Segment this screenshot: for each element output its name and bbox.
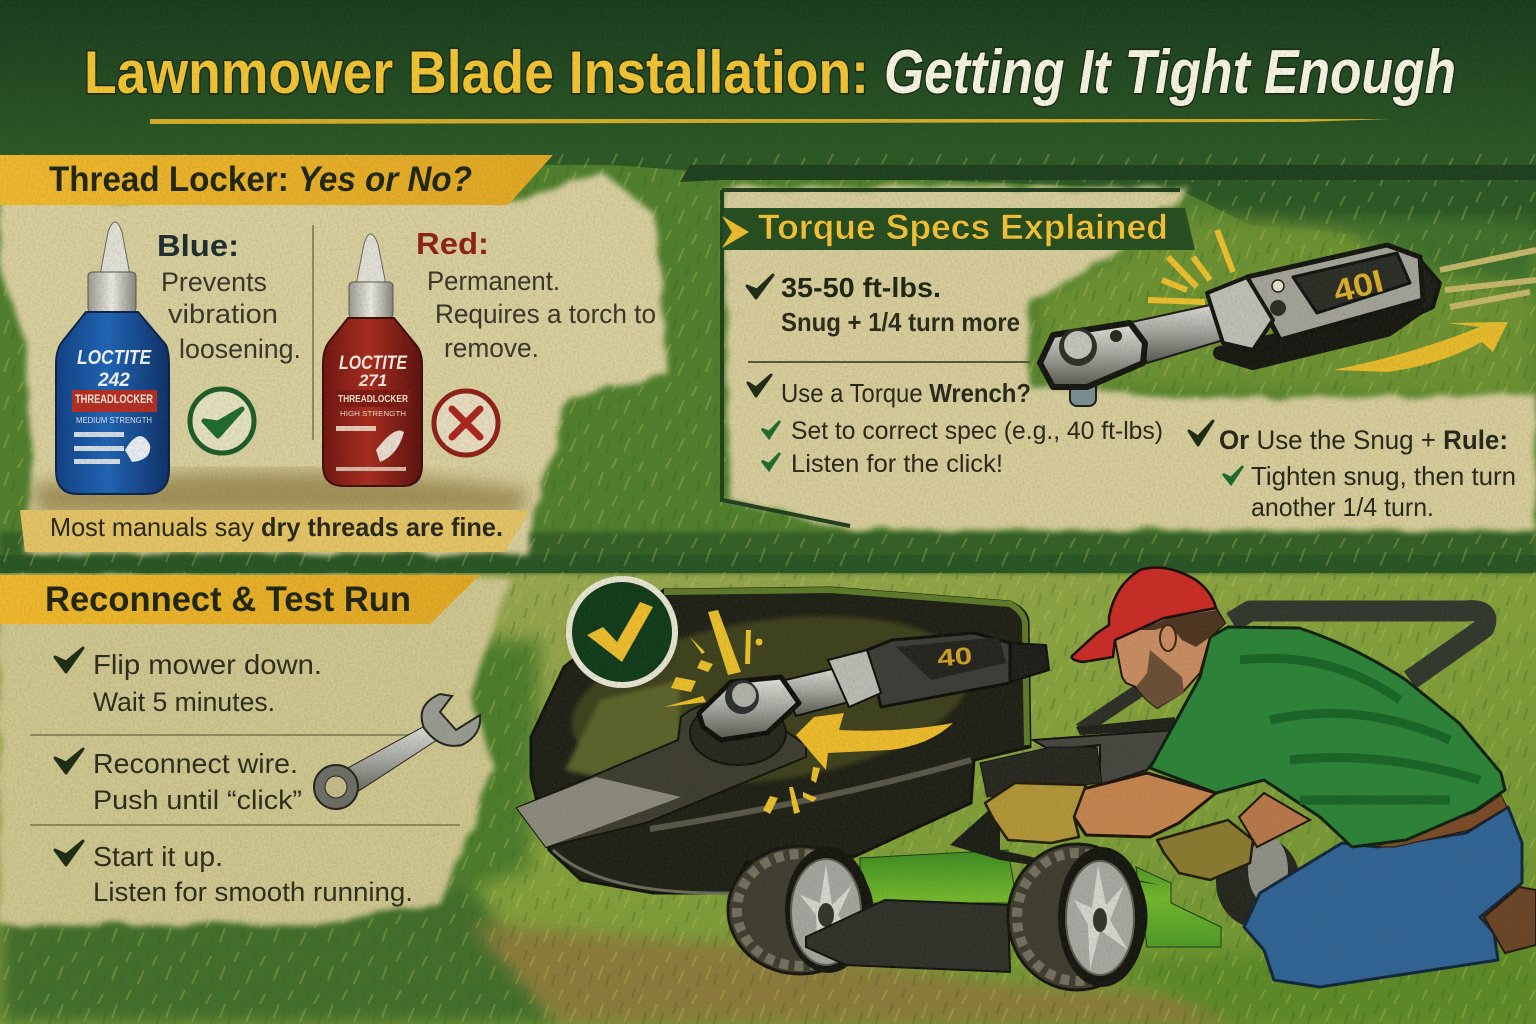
glove lower bbox=[1157, 820, 1253, 880]
deck rim highlight bbox=[664, 590, 1027, 745]
mower handle mount bbox=[1076, 717, 1175, 735]
mower shroud bbox=[1033, 730, 1175, 785]
torque wrench option: Set to correct spec (e.g., 40 ft-lbs) bbox=[791, 417, 1163, 445]
jeans bbox=[1244, 807, 1522, 987]
torque wrench option: Listen for the click! bbox=[791, 450, 1003, 478]
icon: wrench bbox=[314, 694, 480, 809]
icon: red Loctite bottle: 271 bbox=[358, 371, 387, 390]
icon: digital torque wrench: 40I bbox=[1330, 262, 1387, 309]
upper arm bbox=[1074, 773, 1216, 837]
panel background: thread locker bbox=[0, 170, 668, 553]
blade bbox=[517, 700, 806, 847]
blade hub bbox=[690, 701, 786, 765]
beard bbox=[1136, 650, 1184, 708]
spec line: 35-50 ft-lbs. bbox=[781, 272, 941, 303]
boot bbox=[1484, 887, 1536, 953]
panel background: reconnect bbox=[0, 578, 510, 925]
step: flip mower: Flip mower down. bbox=[93, 649, 322, 680]
step: start it up: Start it up. bbox=[93, 841, 223, 872]
panel: reconnect and test run bbox=[0, 575, 510, 925]
step: reconnect wire: Reconnect wire. bbox=[93, 748, 298, 779]
green mower body bbox=[860, 850, 1221, 947]
divider bbox=[748, 361, 1030, 363]
step: flip mower: Wait 5 minutes. bbox=[93, 687, 275, 717]
panel: torque specs bbox=[680, 165, 1536, 530]
mower handle upper bbox=[1232, 611, 1486, 680]
belt bbox=[1375, 795, 1507, 847]
label: red: Permanent. bbox=[427, 266, 560, 296]
dividers bbox=[30, 735, 460, 825]
callout: dry threads: Most manuals say dry threads are fine. bbox=[50, 512, 503, 542]
deck inner moss bbox=[561, 593, 979, 807]
red cap bbox=[1072, 568, 1216, 662]
icon: digital torque wrench bbox=[1040, 245, 1440, 406]
label: red: Requires a torch to bbox=[435, 299, 656, 329]
wheel: rear bbox=[1216, 836, 1300, 928]
icon: blue Loctite bottle bbox=[56, 222, 169, 494]
deck lower highlight bbox=[553, 850, 731, 893]
label: blue bbox=[157, 228, 301, 364]
heading: torque specs: Torque Specs Explained bbox=[758, 208, 1168, 247]
icon: blue Loctite bottle: 242 bbox=[97, 370, 130, 391]
title underline bbox=[150, 119, 1390, 124]
label: red bbox=[416, 226, 656, 363]
torque wrench option bbox=[748, 375, 1163, 478]
icon: blue Loctite bottle: THREADLOCKER bbox=[75, 394, 154, 406]
icon: red Loctite bottle: THREADLOCKER bbox=[338, 393, 408, 405]
step: reconnect wire: Push until “click” bbox=[93, 785, 302, 815]
step: start it up: Listen for smooth running. bbox=[93, 877, 413, 907]
shirt folds bbox=[1240, 658, 1480, 800]
mower shroud plate bbox=[980, 747, 1102, 797]
panel top band bbox=[680, 165, 1536, 182]
panel: thread locker bbox=[0, 155, 668, 553]
label: blue: Prevents bbox=[161, 267, 267, 297]
snug rule option: Or Use the Snug + Rule: bbox=[1219, 425, 1508, 455]
face bbox=[1115, 608, 1225, 708]
icon: red Loctite bottle bbox=[323, 234, 422, 486]
torque wrench on blade: 40 bbox=[936, 643, 973, 673]
heading banner: thread locker: Thread Locker: Yes or No? bbox=[49, 160, 472, 199]
icon: blue check bbox=[190, 389, 254, 453]
icon: red cross bbox=[434, 391, 498, 455]
icon: spark burst bbox=[1148, 230, 1233, 302]
deck lower lip bbox=[650, 760, 971, 829]
label: blue: Blue: bbox=[157, 228, 239, 263]
yellow sparks upper bbox=[664, 610, 751, 707]
heading banner: thread locker bbox=[0, 155, 553, 205]
wheel: front left bbox=[728, 846, 872, 974]
glove upper bbox=[985, 783, 1086, 843]
divider bbox=[312, 225, 314, 440]
icon: red Loctite bottle: LOCTITE bbox=[339, 353, 408, 374]
lower forearm bbox=[1239, 793, 1310, 847]
label: blue: vibration bbox=[168, 299, 278, 329]
mower front skirt bbox=[806, 900, 1010, 972]
panel frame bbox=[722, 190, 1180, 526]
icon: blue Loctite bottle: MEDIUM STRENGTH bbox=[76, 416, 152, 425]
callout: dry threads bbox=[20, 510, 530, 552]
icon: yellow motion arrow bbox=[1333, 322, 1508, 372]
step: flip mower bbox=[55, 648, 322, 717]
check badge bbox=[569, 579, 675, 685]
blade edge bbox=[517, 777, 681, 847]
label: blue: loosening. bbox=[179, 334, 301, 364]
torque wrench option: Use a Torque Wrench? bbox=[781, 378, 1031, 408]
spark dot bbox=[756, 638, 762, 646]
heading banner: reconnect bbox=[0, 575, 480, 624]
mower chassis bbox=[950, 800, 1160, 885]
dirt under bottles bbox=[30, 471, 530, 515]
step: reconnect wire bbox=[55, 748, 302, 815]
yellow sparks lower bbox=[763, 767, 820, 814]
ear bbox=[1160, 625, 1176, 651]
icon: blue Loctite bottle: LOCTITE bbox=[77, 347, 152, 369]
icon: motion lines bbox=[1440, 250, 1536, 307]
title: Lawnmower Blade Installation: bbox=[84, 39, 869, 106]
torque wrench on blade bbox=[699, 633, 1049, 740]
deck left moss patch bbox=[565, 680, 680, 780]
title bbox=[84, 38, 1456, 107]
label: red: Red: bbox=[416, 226, 489, 261]
heading banner: reconnect: Reconnect & Test Run bbox=[45, 580, 411, 619]
spec line bbox=[747, 272, 1020, 337]
panel background: torque specs bbox=[722, 188, 1536, 530]
green shirt bbox=[1150, 627, 1505, 847]
label: red: remove. bbox=[444, 333, 539, 363]
wheel: front right bbox=[1008, 844, 1146, 990]
step: start it up bbox=[55, 841, 413, 907]
snug rule option bbox=[1189, 421, 1516, 522]
operator bbox=[985, 568, 1536, 987]
mower deck raised bbox=[531, 588, 1030, 893]
icon: red Loctite bottle: HIGH STRENGTH bbox=[340, 409, 406, 418]
yellow arrow bbox=[796, 713, 953, 770]
hair bbox=[1132, 610, 1225, 647]
spec line: Snug + 1/4 turn more bbox=[781, 307, 1020, 337]
snug rule option: Tighten snug, then turn bbox=[1251, 461, 1516, 491]
illustration: mower and operator bbox=[517, 568, 1536, 990]
mower handle lower bbox=[1080, 690, 1140, 730]
snug rule option: another 1/4 turn. bbox=[1251, 492, 1434, 522]
